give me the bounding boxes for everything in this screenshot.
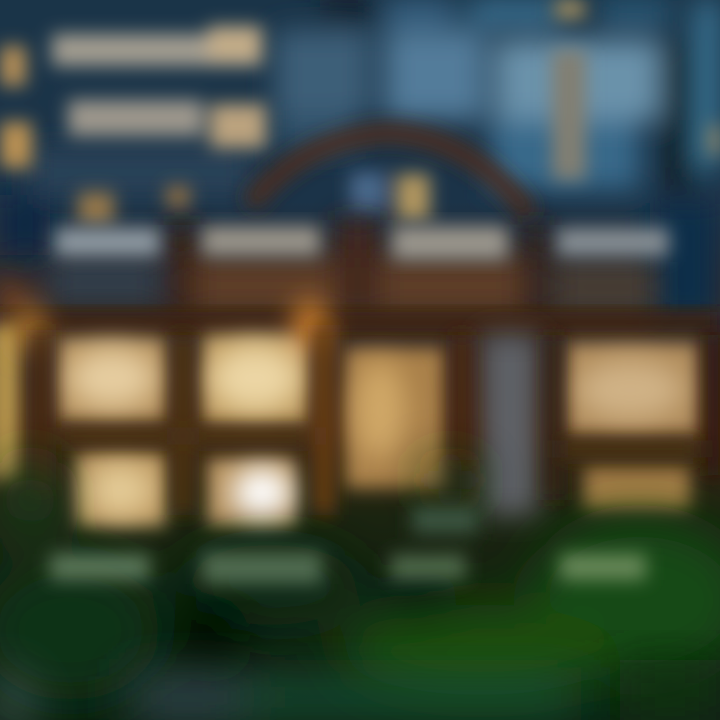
foreground path and lawn: [0, 660, 720, 720]
gable window: [350, 172, 430, 220]
lit windows, lower floor: [0, 325, 699, 526]
eaves: pale fascia panels: [55, 226, 669, 260]
garden: pale foliage strips: [50, 506, 646, 584]
timber band under eaves: [0, 312, 720, 332]
window glow highlights: [16, 299, 684, 519]
dark timber posts: [32, 325, 720, 515]
stone column: [482, 335, 538, 515]
roof gable arch: [250, 133, 530, 215]
upper facade: blue glass panels: [0, 0, 720, 320]
eaves: brown timber band: [0, 220, 655, 325]
upper facade: pale window strips: [0, 0, 720, 224]
garden: green bushes: [0, 460, 720, 700]
